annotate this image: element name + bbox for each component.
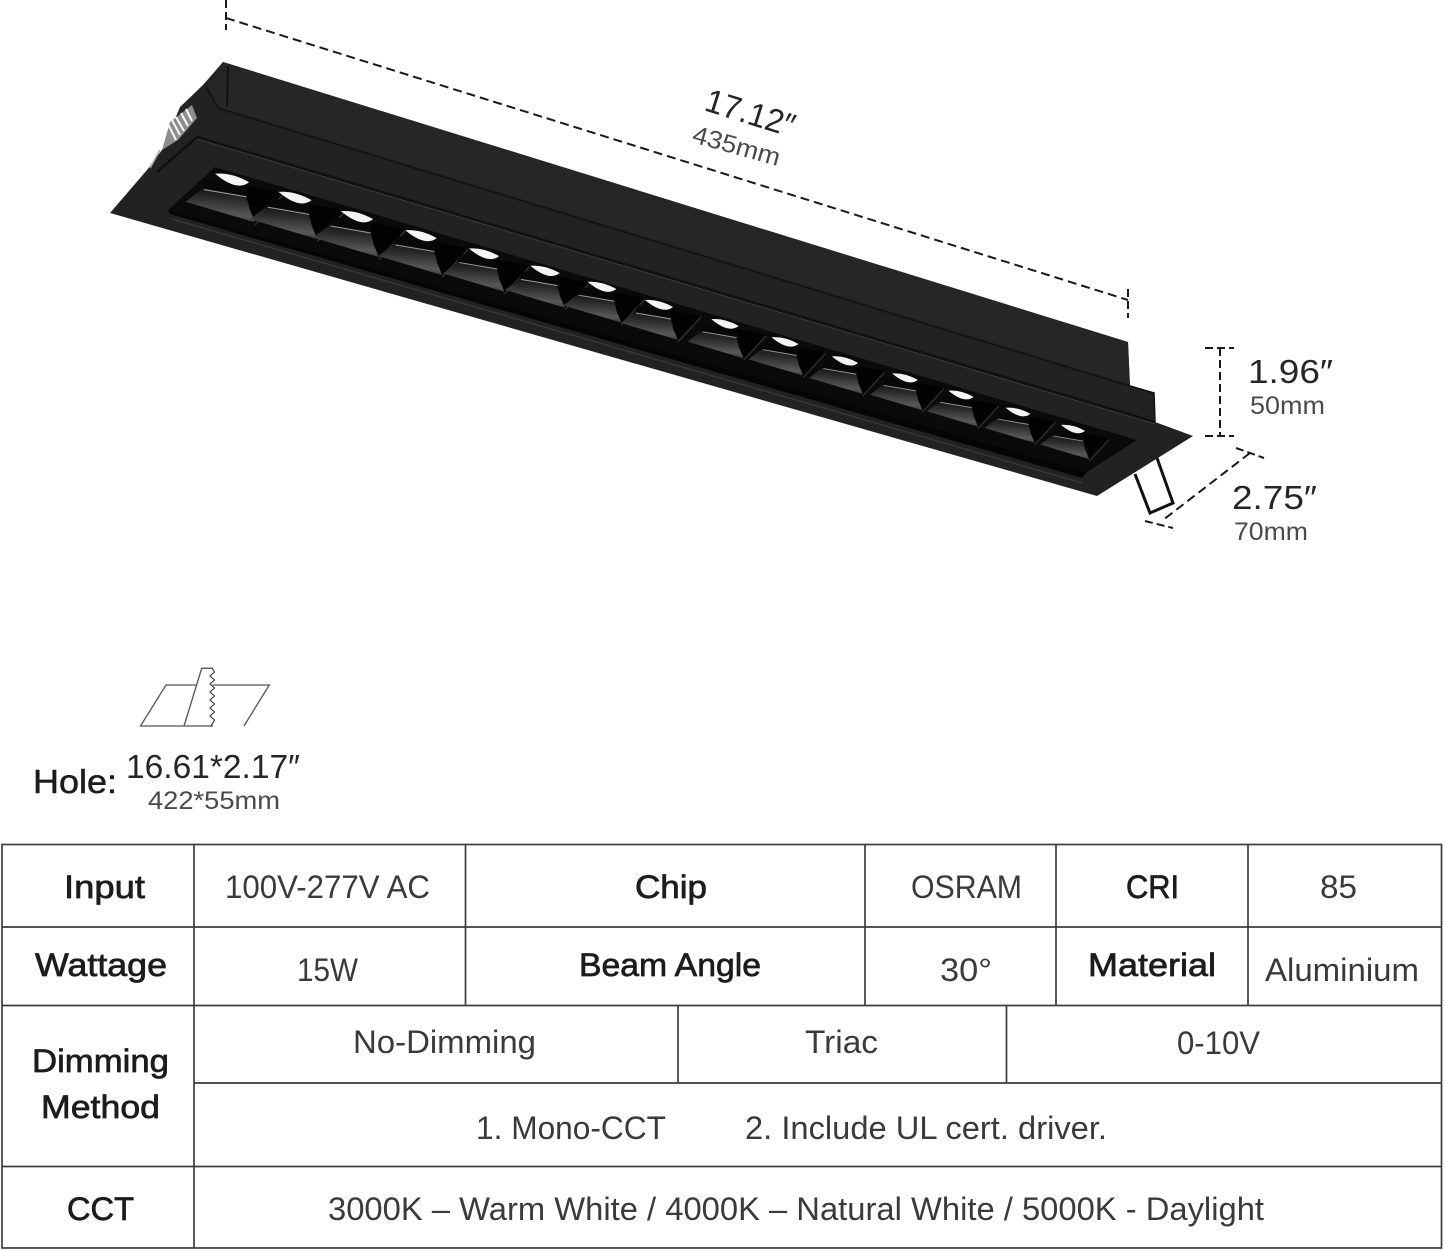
row: input, chip, CRI: Chip [635, 869, 707, 905]
hole size label: 16.61*2.17″ [126, 748, 300, 785]
dimension: width: 2.75″ [1232, 479, 1317, 516]
row: wattage, beam angle, material: Aluminium [1265, 952, 1419, 988]
dimension: width [1145, 448, 1317, 546]
spring clip left [150, 105, 197, 168]
row: wattage, beam angle, material: Wattage [35, 947, 167, 983]
hole size label [33, 748, 300, 815]
mounting clip right [1135, 458, 1173, 513]
dimension: height: 50mm [1250, 392, 1325, 420]
dimension: length [226, 0, 1128, 318]
row: wattage, beam angle, material: 15W [297, 952, 359, 988]
hole size label: Hole: [33, 763, 117, 800]
row: dimming method: Triac [805, 1024, 878, 1060]
row: wattage, beam angle, material: Material [1088, 947, 1216, 983]
back wall [207, 62, 1130, 386]
lens slot [168, 167, 1137, 472]
row: input, chip, CRI: Input [64, 869, 145, 905]
row: input, chip, CRI: 100V-277V AC [225, 869, 430, 905]
dimension: length: 17.12″ [701, 81, 800, 144]
housing ridge lines [157, 66, 1155, 424]
row: dimming method: 2. Include UL cert. driver. [745, 1110, 1107, 1146]
row: dimming method: Dimming [32, 1043, 169, 1079]
dimension: height [1205, 348, 1333, 436]
row: input, chip, CRI [64, 869, 1357, 905]
table grid [2, 844, 1442, 1248]
dimension: length: 435mm [689, 121, 784, 172]
row: input, chip, CRI: 85 [1320, 869, 1357, 905]
row: dimming method [32, 1024, 1261, 1146]
row: wattage, beam angle, material: 30° [940, 952, 992, 988]
dimension: width: 70mm [1234, 518, 1308, 546]
icon: saw cutting hole [140, 668, 269, 726]
dimension: height: 1.96″ [1248, 353, 1333, 390]
row: dimming method: 1. Mono-CCT [476, 1110, 666, 1146]
row: CCT: 3000K – Warm White / 4000K – Natural White / 5000K - Daylight [328, 1191, 1264, 1227]
row: dimming method: 0-10V [1177, 1025, 1261, 1061]
row: dimming method: Method [41, 1089, 160, 1125]
housing body [110, 62, 1193, 496]
product photo: recessed linear light [110, 62, 1193, 513]
specification table [2, 844, 1442, 1248]
row: wattage, beam angle, material [35, 947, 1419, 988]
reflector cells [186, 174, 1109, 461]
row: CCT: CCT [67, 1191, 134, 1227]
row: wattage, beam angle, material: Beam Angle [579, 947, 761, 983]
row: dimming method: No-Dimming [353, 1024, 536, 1060]
row: input, chip, CRI: CRI [1126, 869, 1179, 905]
hole size label: 422*55mm [148, 787, 280, 815]
row: input, chip, CRI: OSRAM [911, 869, 1022, 905]
